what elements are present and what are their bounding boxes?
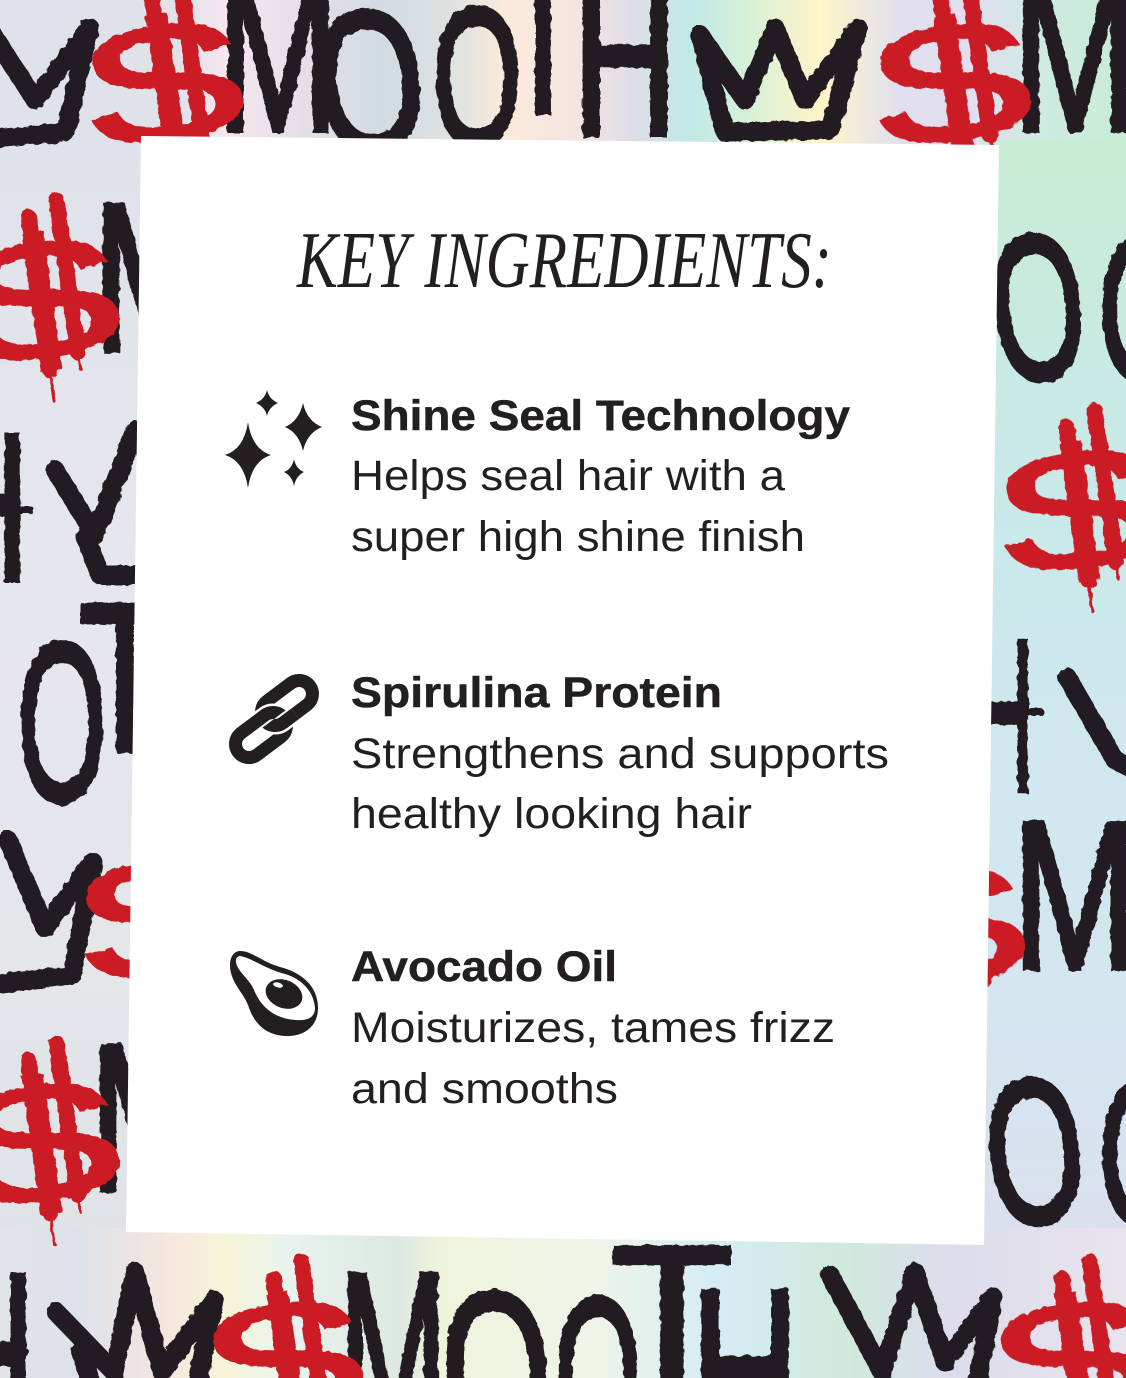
graffiti pattern: black letters: M: [90, 1000, 214, 1235]
graffiti pattern: black letters: H: [972, 595, 1034, 836]
graffiti pattern: black letters: T: [79, 560, 171, 795]
graffiti pattern: black letters: O: [979, 189, 1096, 427]
icon: sparkles: [225, 390, 322, 488]
ingredient 2 description: healthy looking hair: [351, 790, 752, 838]
ingredient 3 description: Moisturizes, tames frizz: [351, 1004, 835, 1052]
ingredient 2 description: [351, 730, 889, 838]
ingredient 1 description: [351, 452, 805, 561]
ingredient 1 description: super high shine finish: [351, 513, 805, 561]
ingredient 2 description: Strengthens and supports: [351, 730, 889, 778]
icon: avocado: [230, 951, 318, 1036]
ingredient 2 heading: Spirulina Protein: [351, 669, 722, 717]
ingredient 3 heading: Avocado Oil: [351, 943, 617, 991]
ingredient 3 description: [351, 1004, 835, 1113]
white card: [126, 136, 999, 1245]
ingredient 3 description: and smooths: [351, 1065, 618, 1113]
title: KEY INGREDIENTS:: [296, 215, 832, 305]
graffiti pattern: red dollar signs: $: [856, 823, 1037, 1033]
graffiti pattern: red dollar signs: $: [68, 813, 249, 1023]
ingredient 1 heading: Shine Seal Technology: [351, 392, 850, 440]
graffiti pattern: black letters: M: [93, 160, 217, 395]
graffiti pattern: black letters: O: [17, 596, 107, 848]
graffiti pattern: black letters: O: [974, 1032, 1095, 1270]
icon: chain link: [230, 675, 318, 763]
ingredient 1 description: Helps seal hair with a: [351, 452, 785, 500]
